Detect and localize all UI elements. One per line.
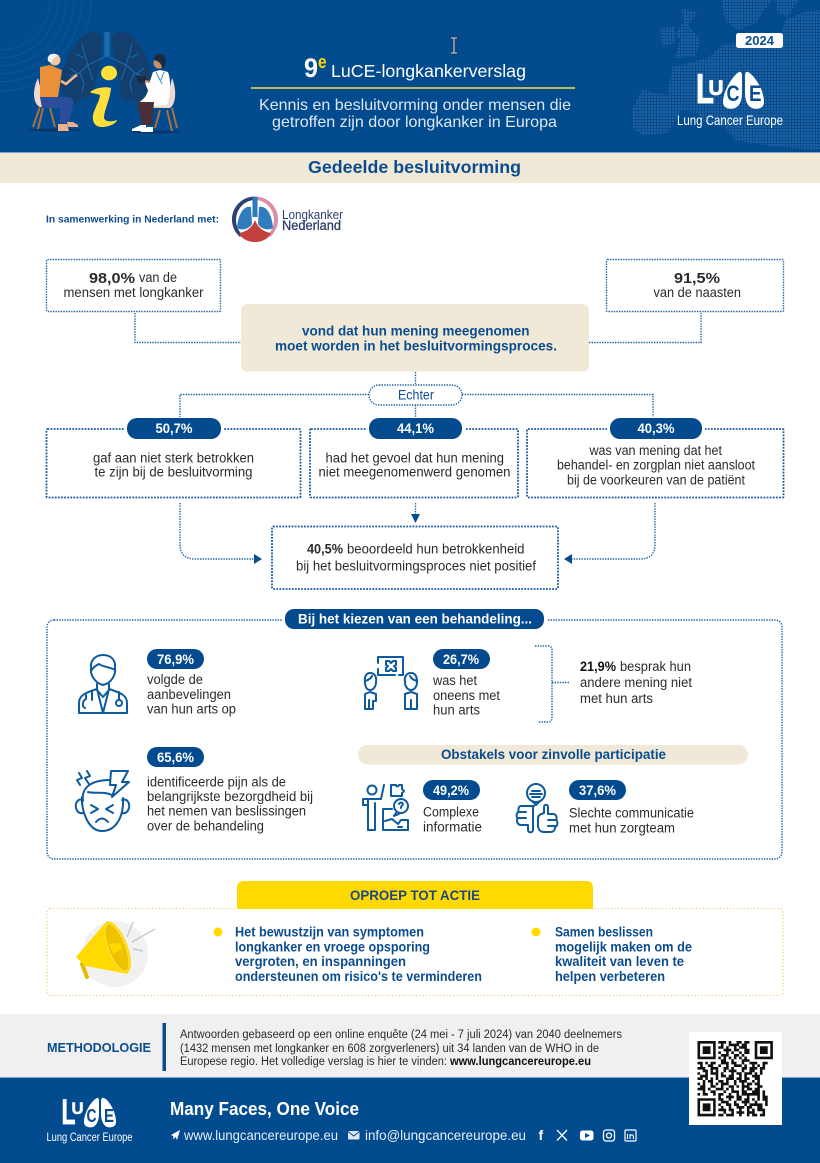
heading band: Gedeelde besluitvorming: [0, 153, 820, 183]
stat: 65,6%: belangrijkste bezorgdheid bij: [147, 789, 313, 804]
title divider: [251, 87, 575, 89]
call to action item 2: helpen verbeteren: [555, 969, 665, 984]
stat: 49,2%: Complexe: [423, 804, 479, 820]
box: 91,5%: 91,5%: [674, 270, 720, 287]
icon: disagreeing people: [365, 657, 417, 709]
finding: 50,7%: 50,7%: [156, 421, 192, 436]
icon: pain: [76, 771, 129, 831]
box: 98,0%: [46, 260, 220, 312]
year badge: [736, 33, 783, 48]
call to action tab: OPROEP TOT ACTIE: [350, 887, 480, 903]
result box: 40,5%: bij het besluitvormingsproces niet positief: [296, 558, 536, 574]
methodology band: METHODOLOGIE: [47, 1040, 151, 1055]
stat: 49,2%: informatie: [423, 820, 482, 834]
logo: Lung Cancer Europe header: [677, 65, 783, 128]
icon: text cursor: [450, 38, 458, 53]
yellow i: [90, 66, 117, 127]
centre statement: vond dat hun mening meegenomen: [302, 324, 530, 338]
box: 98,0%: van de: [139, 270, 177, 285]
lungs: [60, 32, 153, 106]
logo: Lung Cancer Europe header: Lung Cancer Europe: [677, 112, 783, 128]
stat: 49,2%: 49,2%: [433, 783, 469, 798]
doctor: [129, 54, 181, 133]
sub-heading: Obstakels: Obstakels voor zinvolle participatie: [441, 747, 666, 762]
finding: 40,3%: was van mening dat het: [589, 443, 722, 458]
call to action item 2: kwaliteit van leven te: [555, 954, 684, 969]
Echter pill: [369, 385, 462, 405]
result box: 40,5%: beoordeeld hun betrokkenheid: [347, 542, 524, 556]
partner credit: In samenwerking in Nederland met:: [46, 214, 219, 226]
logo: Lung Cancer Europe footer: L: [62, 1093, 76, 1132]
illustration: patient and doctor with lungs: [28, 32, 181, 133]
box: 98,0%: 98,0%: [89, 270, 135, 287]
box: 91,5%: van de naasten: [654, 285, 741, 300]
stat: 76,9%: volgde de: [147, 672, 203, 687]
icon: complex information: [363, 785, 408, 830]
finding: 44,1%: [310, 417, 518, 498]
website and email: info@lungcancereurope.eu: [365, 1128, 526, 1143]
patient: [28, 54, 80, 131]
icon: communication thumbs: [517, 784, 557, 832]
box: 98,0%: mensen met longkanker: [64, 285, 204, 300]
social icons: f: [538, 1127, 544, 1143]
panel: treatment choice: [47, 608, 782, 859]
call to action item 2: mogelijk maken om de: [555, 940, 692, 954]
report subtitle: Kennis en besluitvorming onder mensen die: [259, 97, 571, 114]
finding: 40,3%: bij de voorkeuren van de patiënt: [567, 472, 745, 488]
finding: 50,7%: gaf aan niet sterk betrokken: [93, 450, 254, 466]
stat: 37,6%: 37,6%: [579, 783, 616, 798]
QR code: [689, 1032, 782, 1125]
website and email: www.lungcancereurope.eu: [183, 1128, 338, 1143]
call to action item 1: ondersteunen om risico's te verminderen: [235, 969, 482, 984]
header band: [0, 0, 820, 153]
finding: 50,7%: te zijn bij de besluitvorming: [94, 464, 252, 480]
stat: 26,7%: 26,7%: [443, 652, 479, 667]
finding: 40,3%: behandel- en zorgplan niet aansloot: [557, 458, 755, 472]
stat: 21,9%: met hun arts: [580, 691, 653, 706]
europe dot map: [632, 0, 820, 150]
heading band: Gedeelde besluitvorming: Gedeelde besluitvorming: [308, 157, 521, 177]
finding: 44,1%: had het gevoel dat hun mening: [326, 450, 504, 466]
finding: 40,3%: 40,3%: [638, 421, 674, 436]
result box: 40,5%: 40,5%: [307, 542, 343, 556]
logo: Lung Cancer Europe footer: C: [86, 1106, 96, 1126]
report subtitle: [259, 97, 571, 131]
result box: 40,5%: [272, 526, 558, 589]
sub-heading: Obstakels: [358, 745, 748, 764]
report title: LuCE-longkankerverslag: [331, 61, 526, 81]
call to action item 1: longkanker en vroege opsporing: [235, 940, 430, 954]
connectors: top boxes to centre box: [135, 313, 701, 342]
logo: Lung Cancer Europe header: C: [726, 81, 740, 106]
icon: doctor: [79, 655, 127, 713]
panel heading: Bij het kiezen van een behandeling...: [298, 612, 532, 626]
centre statement: moet worden in het besluitvormingsproces.: [275, 338, 557, 354]
Echter pill: Echter: [398, 388, 434, 402]
methodology band: (1432 mensen met longkanker en 608 zorgverleners) uit 34 landen van de WHO in de: [180, 1043, 599, 1055]
stat: 49,2%: [423, 780, 482, 834]
methodology band: Europese regio. Het volledige verslag is hier te vinden:: [180, 1056, 447, 1068]
report title: 9: [304, 53, 318, 83]
bracket connector: [535, 646, 569, 722]
arrow: right finding to result: [564, 503, 655, 564]
logo: Lung Cancer Europe footer: Lung Cancer Europe: [46, 1132, 132, 1144]
footer band: [0, 1077, 820, 1163]
stat: 37,6%: [569, 780, 694, 836]
stat: 26,7%: hun arts: [433, 702, 480, 718]
box: 91,5%: [606, 260, 784, 312]
call to action item 1: vergroten, en inspanningen: [235, 954, 406, 969]
stat: 65,6%: identificeerde pijn als de: [147, 774, 286, 790]
social icons: [538, 1127, 636, 1143]
stat: 65,6%: [147, 747, 313, 834]
call to action tab: [237, 881, 593, 909]
stat: 37,6%: Slechte communicatie: [569, 806, 694, 820]
panel: call to action: [47, 881, 783, 996]
logo: Lung Cancer Europe header: U: [708, 77, 724, 100]
stat: 21,9%: besprak hun: [620, 659, 691, 674]
logo: Lung Cancer Europe header: E: [749, 81, 762, 106]
finding: 40,3%: [527, 417, 784, 498]
call to action item 2: [532, 924, 692, 984]
stat: 21,9%: [580, 659, 692, 706]
stat: 76,9%: 76,9%: [157, 652, 194, 667]
report subtitle: getroffen zijn door longkanker in Europa: [272, 114, 557, 131]
logo: Longkanker Nederland: Longkanker: [282, 207, 344, 222]
report title: [304, 52, 526, 83]
stat: 21,9%: 21,9%: [580, 659, 616, 674]
stat: 76,9%: van hun arts op: [147, 702, 236, 716]
call to action item 2: Samen beslissen: [555, 924, 653, 940]
centre statement: [241, 304, 589, 372]
logo: Lung Cancer Europe footer: U: [72, 1099, 84, 1118]
icon: megaphone: [77, 918, 155, 987]
connectors: centre to findings: [180, 372, 653, 418]
stat: 26,7%: was het: [432, 673, 477, 688]
stat: 26,7%: [432, 649, 500, 718]
logo: Lung Cancer Europe footer: [46, 1093, 132, 1144]
stat: 21,9%: andere mening niet: [580, 675, 692, 690]
slogan: Many Faces, One Voice: [170, 1099, 359, 1119]
stat: 37,6%: met hun zorgteam: [569, 820, 675, 836]
logo: Lung Cancer Europe footer: E: [104, 1106, 114, 1126]
stat: 65,6%: het nemen van beslissingen: [147, 804, 306, 818]
methodology band: [0, 1014, 820, 1077]
methodology band: www.lungcancereurope.eu: [449, 1056, 591, 1068]
logo: Lung Cancer Europe header: L: [696, 65, 714, 112]
logo: Longkanker Nederland: Nederland: [282, 218, 341, 233]
methodology band: Antwoorden gebaseerd op een online enquête (24 mei - 7 juli 2024) van 2040 deelnemers: [180, 1029, 622, 1041]
stat: 65,6%: 65,6%: [157, 750, 194, 765]
stat: 76,9%: aanbevelingen: [147, 687, 231, 702]
stat: 76,9%: [147, 649, 236, 716]
arrow: middle finding to result: [411, 503, 420, 523]
panel heading: [282, 608, 547, 631]
stat: 65,6%: over de behandeling: [147, 818, 264, 834]
logo: Longkanker Nederland: [232, 196, 344, 242]
report title: e: [318, 52, 326, 72]
stat: 26,7%: oneens met: [433, 688, 500, 703]
arrow: left finding to result: [180, 503, 262, 564]
website and email: [171, 1128, 526, 1143]
finding: 50,7%: [46, 417, 300, 498]
call to action item 1: [214, 924, 482, 984]
year badge: 2024: [745, 34, 774, 48]
finding: 44,1%: 44,1%: [397, 421, 434, 436]
call to action item 1: Het bewustzijn van symptomen: [235, 924, 424, 940]
finding: 44,1%: niet meegenomenwerd genomen: [318, 464, 510, 480]
